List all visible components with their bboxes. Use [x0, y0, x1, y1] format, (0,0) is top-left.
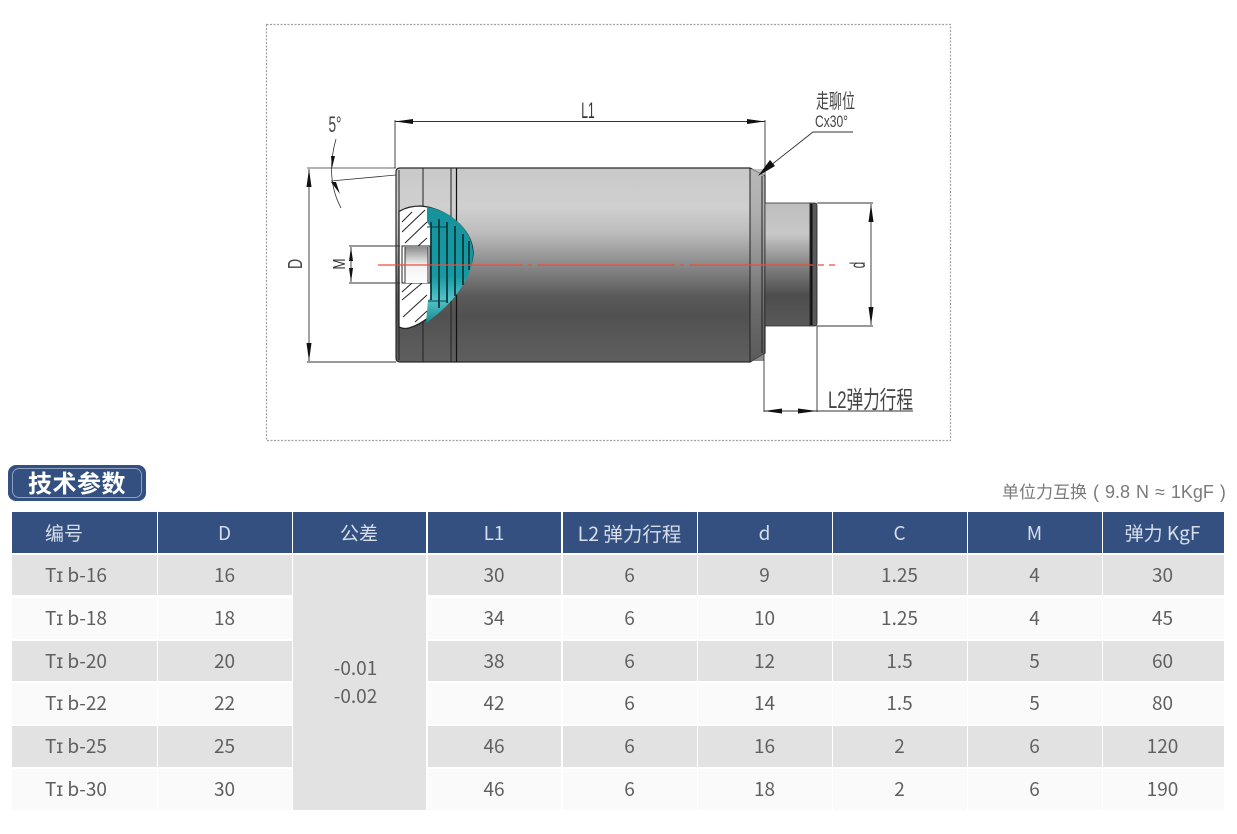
specification table: D [218, 519, 231, 546]
specification table: 10 [754, 604, 775, 631]
specification table: 6 [624, 775, 635, 802]
dimension: d [817, 203, 874, 326]
dimension: M: M [330, 258, 350, 270]
dimension: D [283, 169, 396, 362]
specification table: 1.5 [886, 689, 913, 716]
specification table: 4 [1029, 604, 1040, 631]
specification table: 4 [1029, 560, 1040, 588]
specification table: Tɪ b-16 [45, 560, 107, 588]
specification table: Tɪ b-22 [45, 689, 107, 716]
specification table: 190 [1147, 775, 1178, 802]
dimension: L1 [395, 98, 765, 176]
specification table: 5 [1029, 689, 1040, 716]
specification table: Tɪ b-18 [45, 604, 107, 631]
row: Tɪb-20 [12, 641, 1224, 681]
centre line [378, 264, 835, 266]
dimension: M [330, 246, 400, 283]
specification table: 38 [483, 646, 505, 674]
specification table: 编号 [45, 519, 83, 546]
row: Tɪb-25 [12, 726, 1224, 767]
tolerance merged cell [293, 555, 426, 810]
specification table: d [759, 519, 770, 546]
specification table: 5 [1029, 646, 1040, 674]
heading: technical parameters badge: 技术参数 [28, 464, 126, 499]
specification table: 20 [214, 646, 235, 674]
specification table: 14 [754, 689, 775, 716]
part: plunger tip [765, 203, 817, 326]
specification table: 18 [214, 604, 235, 631]
specification table: 60 [1152, 646, 1173, 674]
specification table: 6 [1029, 732, 1040, 759]
table header row [12, 512, 1224, 553]
specification table: M [1027, 519, 1042, 546]
specification table: 6 [624, 646, 635, 674]
specification table: 2 [894, 775, 905, 802]
specification table: 16 [754, 732, 775, 759]
specification table: Tɪ b-30 [45, 775, 107, 802]
specification table: 弹力 KgF [1125, 519, 1200, 546]
specification table: 6 [1029, 775, 1040, 802]
row: Tɪb-16 [12, 555, 1224, 595]
specification table: 6 [624, 689, 635, 716]
specification table: 120 [1147, 732, 1178, 759]
callout: chamfer C x 30: 走聊位 [816, 90, 855, 113]
dimension: D: D [283, 259, 307, 269]
part: section cut-out with ball and spring [399, 206, 473, 328]
part: main cylinder body [396, 168, 765, 362]
specification table: Tɪ b-25 [45, 732, 107, 759]
specification table: 30 [1152, 560, 1173, 588]
heading: technical parameters badge [8, 465, 146, 501]
specification table: 12 [754, 646, 775, 674]
dimension: d: d [846, 262, 870, 268]
tolerance merged cell: -0.01 [334, 654, 377, 681]
row: Tɪb-30 [45, 775, 1178, 802]
specification table: 16 [214, 560, 235, 588]
specification table: 34 [483, 604, 505, 631]
specification table: 30 [214, 775, 235, 802]
specification table: 9 [759, 560, 770, 588]
row: Tɪb-22 [45, 689, 1173, 716]
specification table: 80 [1152, 689, 1173, 716]
specification table: 6 [624, 604, 635, 631]
specification table: 18 [754, 775, 775, 802]
specification table: 22 [214, 689, 235, 716]
specification table: 46 [483, 775, 505, 802]
specification table: 1.25 [881, 604, 918, 631]
dimension: L2 spring travel [764, 326, 913, 414]
dimension: L2 spring travel: L2弹力行程 [828, 387, 913, 414]
callout: chamfer C x 30: Cx30° [815, 112, 848, 131]
panel: technical drawing [266, 24, 952, 442]
specification table: 1.25 [881, 560, 918, 588]
row: Tɪb-18 [45, 604, 1173, 631]
specification table: C [893, 519, 906, 546]
specification table: 45 [1152, 604, 1173, 631]
specification table: L1 [484, 519, 504, 546]
dashed frame [266, 24, 950, 440]
callout: chamfer C x 30 [758, 90, 855, 176]
unit note: 单位力互换 ( 9.8 N ≈ 1KgF ) [1002, 482, 1226, 502]
specification table: L2 弹力行程 [578, 518, 681, 547]
dimension: 5 degree angle: 5° [328, 112, 342, 137]
specification table: Tɪ b-20 [45, 646, 107, 674]
specification table: 2 [894, 732, 905, 759]
specification table: 46 [483, 732, 505, 759]
dimension: L1: L1 [581, 98, 595, 123]
specification table: 公差 [340, 519, 378, 546]
specification table: 6 [624, 560, 635, 588]
specification table: 42 [483, 689, 505, 716]
specification table: 30 [483, 560, 505, 588]
dimension: 5 degree angle [307, 112, 396, 208]
specification table: 6 [624, 732, 635, 759]
specification table: 1.5 [886, 646, 913, 674]
tolerance merged cell: -0.02 [334, 682, 377, 709]
specification table: 25 [214, 732, 235, 759]
